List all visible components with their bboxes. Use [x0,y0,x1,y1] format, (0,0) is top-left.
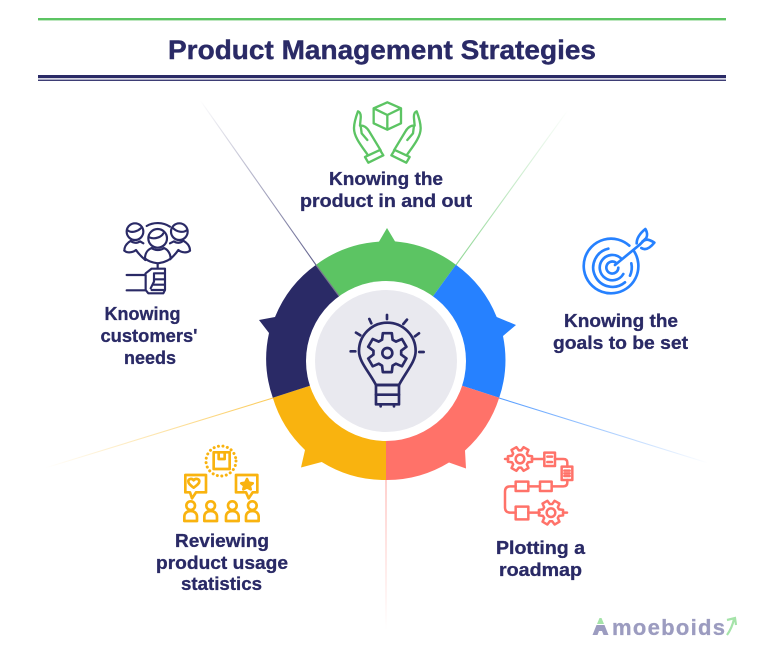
title: Product Management Strategies [168,35,596,65]
top green rule [38,18,726,20]
label: plotting a roadmap [496,538,586,580]
segment: coral [386,361,499,480]
icon: customers held by a fist [124,223,190,293]
logo: Amoeboids: moeboids [612,615,725,640]
white inner disc [306,281,466,441]
label: knowing the goals: Knowing the [564,311,678,331]
segment: blue [386,265,516,398]
label: knowing customers' needs [100,304,198,368]
segment: yellow [273,361,386,480]
icon: lightbulb with gear [351,315,424,406]
label: knowing customers' needs: customers' [100,326,198,346]
label: knowing the product: Knowing the [329,169,443,189]
label: reviewing product usage statistics: Reviewing [175,531,269,551]
label: plotting a roadmap: Plotting a [496,538,586,558]
label: knowing customers' needs: needs [124,348,176,368]
icon: roadmap flow [505,447,572,525]
segment: navy [259,265,386,398]
ray over ring [316,265,339,296]
double navy rule [38,75,726,81]
label: knowing the product: product in and out [300,191,472,211]
grey inner disc [315,290,457,432]
label: reviewing product usage statistics: statistics [181,574,262,594]
label: knowing the product [300,169,472,211]
label: reviewing product usage statistics: product usage [156,553,288,573]
icon: product usage statistics [184,446,259,521]
icon: hands holding a box [354,102,421,163]
label: knowing customers' needs: Knowing [104,304,180,324]
label: reviewing product usage statistics [156,531,288,594]
label: plotting a roadmap: roadmap [499,560,582,580]
radial rays [45,100,708,630]
icon: target with arrow [584,229,654,293]
label: knowing the goals [553,311,688,353]
central ring diagram [259,228,516,480]
segment: green [316,228,456,361]
label: knowing the goals: goals to be set [553,333,688,353]
